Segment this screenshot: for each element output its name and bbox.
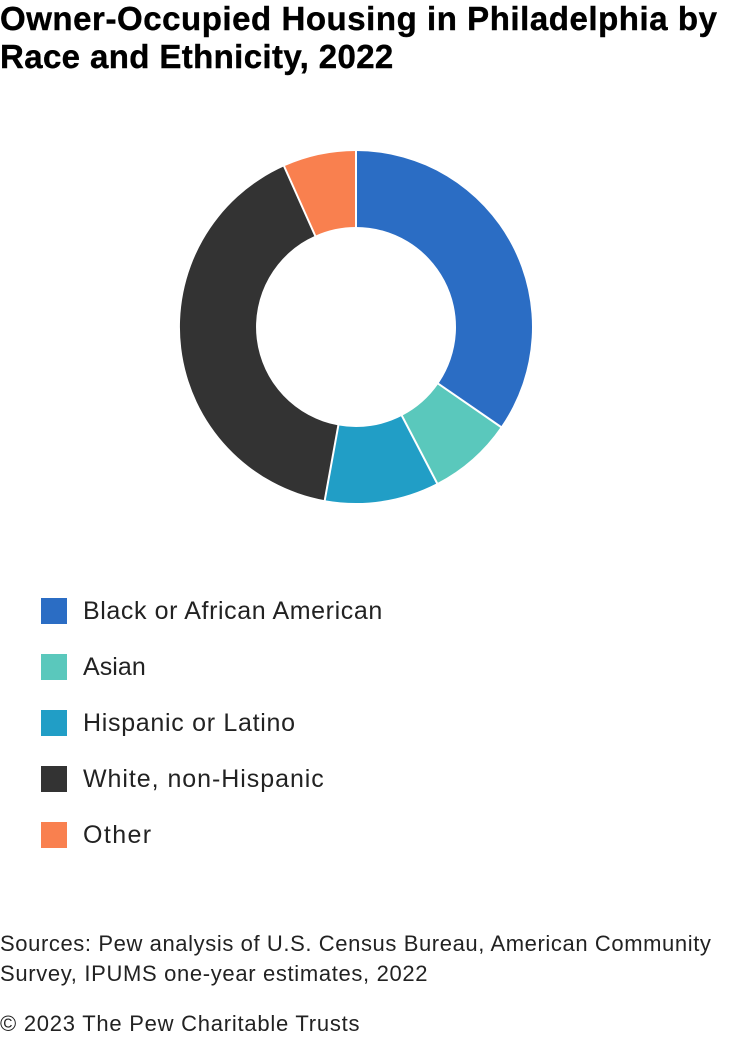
legend item: Hispanic or Latino: Hispanic or Latino [83, 709, 296, 737]
donut chart [180, 151, 532, 503]
segment: Asian [402, 384, 501, 483]
segment: White, non-Hispanic [180, 166, 338, 500]
legend item: Black or African American: Black or African American [83, 597, 383, 625]
legend item: Asian [41, 653, 146, 681]
segment: Other [284, 151, 356, 236]
legend item: Asian: Asian [83, 653, 146, 681]
title [0, 0, 718, 76]
title: Owner-Occupied Housing in Philadelphia by [0, 0, 717, 37]
legend item: White, non-Hispanic: White, non-Hispanic [83, 765, 325, 793]
legend item: Other [41, 821, 153, 849]
legend [41, 597, 383, 849]
segment: Black or African American [356, 151, 532, 427]
segment: Hispanic or Latino [325, 416, 437, 503]
copyright: © 2023 The Pew Charitable Trusts [0, 1011, 360, 1036]
title: Race and Ethnicity, 2022 [0, 38, 394, 75]
sources note [0, 931, 712, 986]
sources note: Sources: Pew analysis of U.S. Census Bureau, American Community [0, 931, 712, 956]
sources note: Survey, IPUMS one-year estimates, 2022 [0, 961, 428, 986]
legend item: Other: Other [83, 821, 153, 849]
